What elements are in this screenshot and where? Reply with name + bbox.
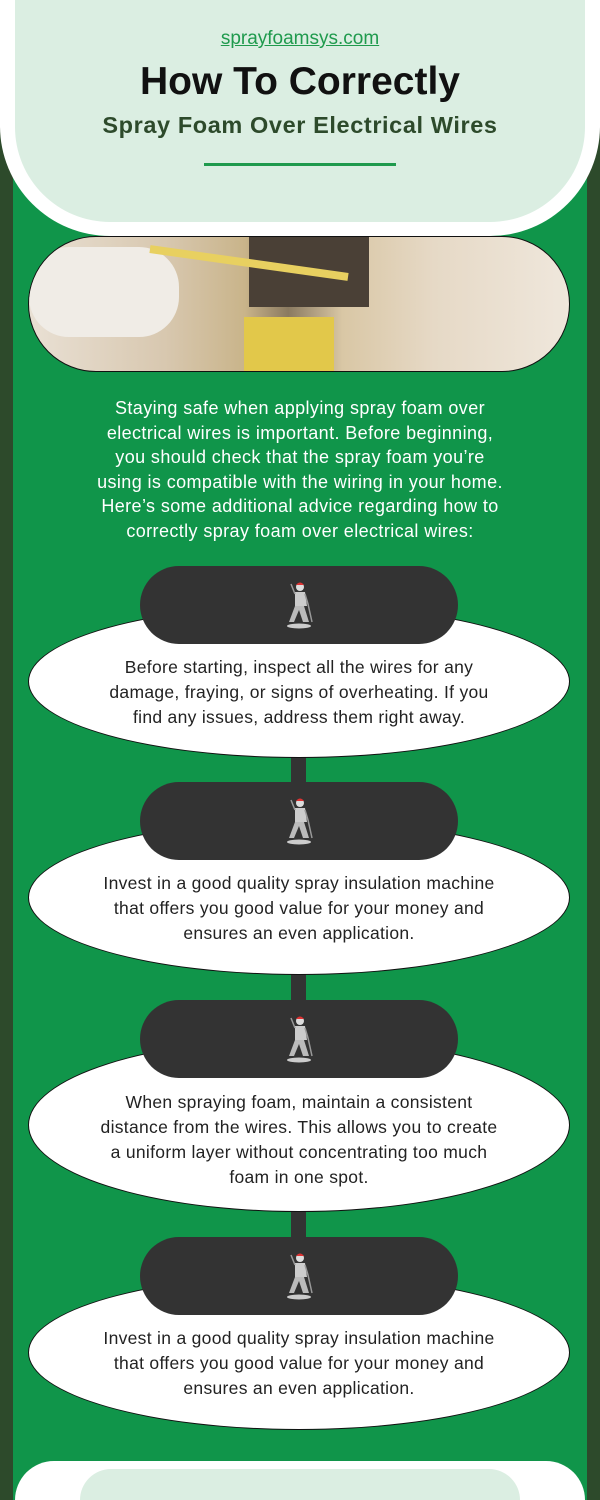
intro paragraph: Here’s some additional advice regarding how to <box>101 496 499 516</box>
icon: worker <box>140 1237 458 1315</box>
text card 3: distance from the wires. This allows you to create <box>101 1117 497 1137</box>
text card 4: that offers you good value for your money and <box>114 1353 484 1373</box>
step 3 <box>28 1000 570 1212</box>
text card 4: Invest in a good quality spray insulation machine <box>103 1328 495 1348</box>
text card 2: that offers you good value for your money and <box>114 898 484 918</box>
website link: sprayfoamsys.com <box>221 28 379 49</box>
icon: worker <box>140 782 458 860</box>
intro paragraph: electrical wires is important. Before beginning, <box>107 423 493 443</box>
text card 1: damage, fraying, or signs of overheating. If you <box>109 682 489 702</box>
icon: worker <box>140 566 458 644</box>
subtitle: Spray Foam Over Electrical Wires <box>102 112 498 138</box>
header panel <box>0 0 600 236</box>
text card 3: When spraying foam, maintain a consistent <box>126 1092 472 1112</box>
text card 1 <box>28 605 570 758</box>
title: How To Correctly <box>140 60 460 103</box>
intro paragraph: using is compatible with the wiring in your home. <box>97 472 503 492</box>
intro paragraph: you should check that the spray foam you’re <box>115 447 485 467</box>
intro paragraph: Staying safe when applying spray foam over <box>115 398 485 418</box>
text card 1: Before starting, inspect all the wires for any <box>125 657 473 677</box>
footer panel <box>15 1461 585 1500</box>
photo: spray foam over wires <box>28 236 570 372</box>
text card 2: Invest in a good quality spray insulation machine <box>103 873 495 893</box>
text card 3 <box>28 1038 570 1212</box>
step 2 <box>28 782 570 975</box>
text card 2 <box>28 820 570 975</box>
icon: worker <box>140 1000 458 1078</box>
text card 4 <box>28 1275 570 1430</box>
text card 3: a uniform layer without concentrating too much <box>111 1142 487 1162</box>
text card 3: foam in one spot. <box>229 1167 369 1187</box>
intro paragraph: correctly spray foam over electrical wires: <box>126 521 474 541</box>
step 4 <box>28 1237 570 1430</box>
text card 1: find any issues, address them right away. <box>133 707 465 727</box>
text card 2: ensures an even application. <box>183 923 415 943</box>
intro paragraph <box>97 398 503 541</box>
text card 4: ensures an even application. <box>183 1378 415 1398</box>
step 1 <box>28 566 570 758</box>
